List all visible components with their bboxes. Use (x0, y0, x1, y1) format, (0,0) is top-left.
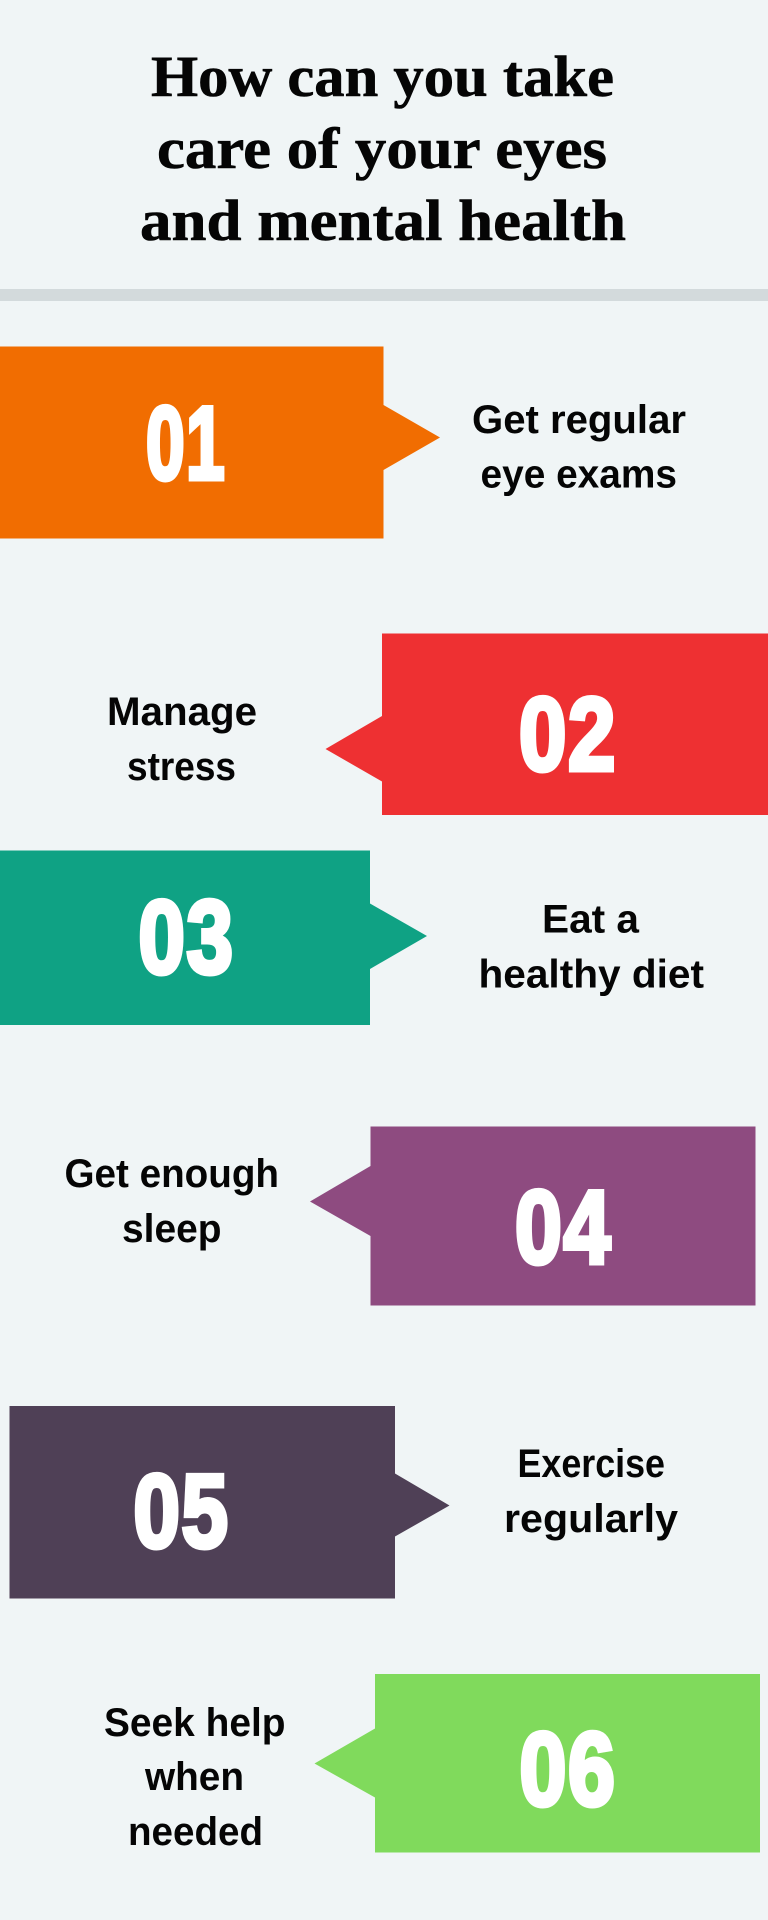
label: get regular eye exams: Get regular (472, 398, 686, 442)
number 04: 04 (515, 1170, 612, 1286)
callout: red arrow box (326, 634, 768, 815)
panel: step 02 (107, 634, 768, 815)
panel: step 05 (10, 1406, 679, 1598)
label: get enough sleep: sleep (122, 1207, 222, 1251)
label: seek help when needed: when (144, 1755, 244, 1799)
title (140, 44, 626, 253)
label: eat a healthy diet (478, 898, 704, 996)
label: get regular eye exams (472, 398, 686, 496)
callout: dark plum arrow box (10, 1406, 450, 1598)
label: get regular eye exams: eye exams (480, 452, 677, 496)
label: eat a healthy diet: Eat a (542, 898, 640, 942)
label: seek help when needed: Seek help (104, 1701, 286, 1745)
label: manage stress: stress (127, 745, 236, 789)
number 03: 03 (138, 880, 234, 996)
title: How can you take (151, 44, 614, 109)
label: exercise regularly: regularly (504, 1497, 679, 1541)
label: manage stress: Manage (107, 690, 257, 734)
panel: step 06 (104, 1674, 760, 1854)
panel: step 01 (0, 346, 686, 538)
callout: orange arrow box (0, 346, 440, 538)
label: exercise regularly: Exercise (518, 1442, 665, 1486)
label: seek help when needed: needed (128, 1810, 263, 1854)
label: manage stress (107, 690, 257, 789)
callout: purple arrow box (310, 1126, 756, 1306)
label: exercise regularly (504, 1442, 679, 1541)
title: and mental health (140, 188, 626, 253)
number 01: 01 (146, 386, 226, 502)
label: eat a healthy diet: healthy diet (478, 952, 704, 996)
panel: step 03 (0, 850, 704, 1025)
number 06: 06 (520, 1712, 616, 1828)
label: get enough sleep (64, 1152, 279, 1251)
number 02: 02 (519, 677, 617, 793)
callout: teal arrow box (0, 850, 427, 1025)
label: seek help when needed (104, 1701, 286, 1854)
callout: green arrow box (314, 1674, 760, 1852)
panel: step 04 (64, 1126, 756, 1306)
label: get enough sleep: Get enough (64, 1152, 279, 1196)
title: care of your eyes (157, 116, 607, 181)
number 05: 05 (134, 1454, 230, 1570)
